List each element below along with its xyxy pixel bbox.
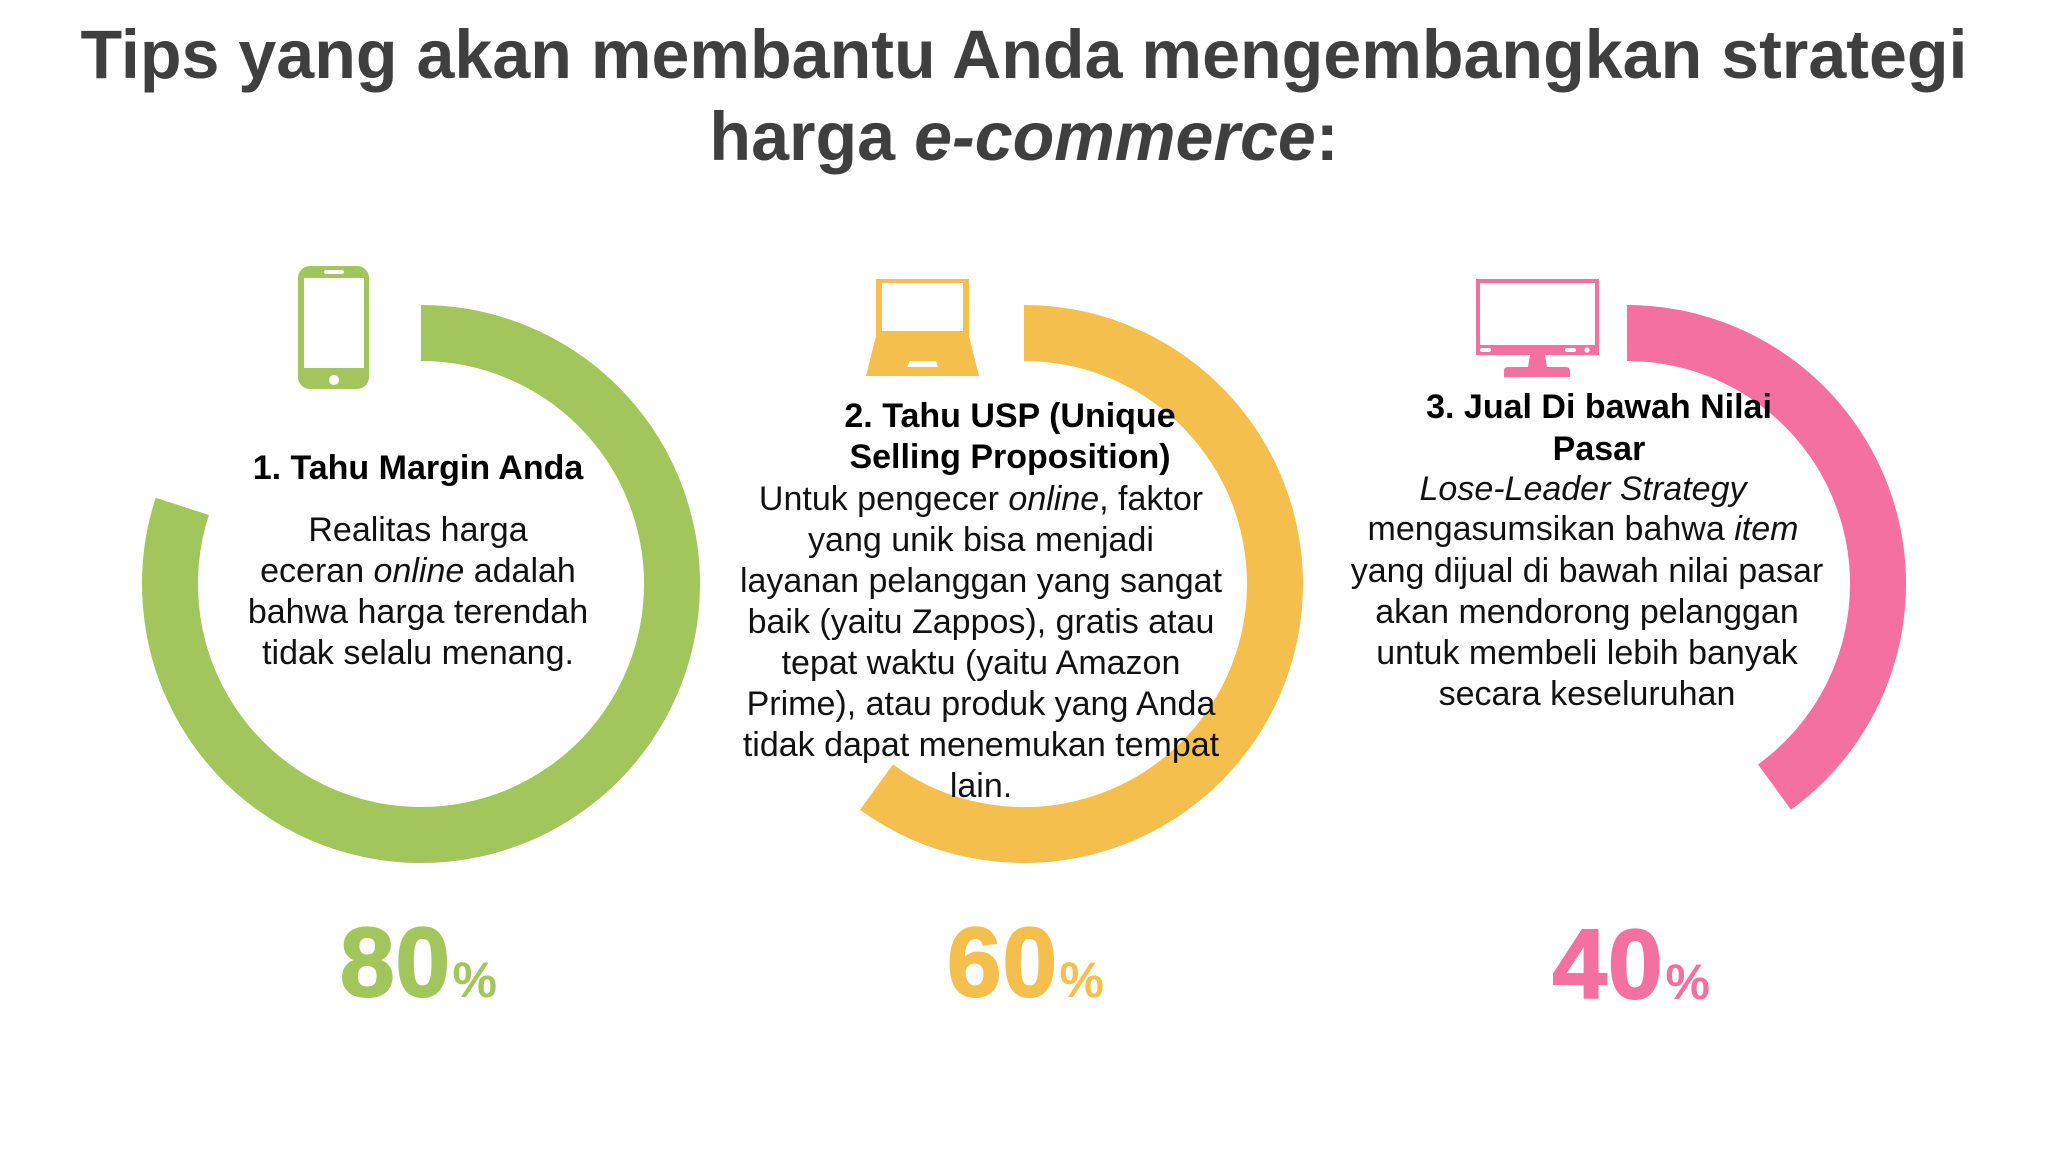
heading: tip 1: 1. Tahu Margin Anda	[253, 449, 584, 487]
heading: tip 2: Selling Proposition)	[849, 438, 1171, 476]
icon: monitor	[1476, 279, 1599, 377]
text: tip 2 body: tidak dapat menemukan tempat	[743, 726, 1220, 764]
heading: tip 2	[844, 397, 1176, 476]
text: tip 3 body: untuk membeli lebih banyak	[1376, 634, 1799, 672]
text: tip 3 body: secara keseluruhan	[1439, 675, 1735, 713]
panel: tip 1 margin	[170, 266, 672, 1017]
text: tip 2 body: layanan pelanggan yang sangat	[740, 562, 1223, 600]
value: 60%: 60	[947, 907, 1058, 1017]
text: tip 2 body: lain.	[950, 767, 1012, 805]
text: tip 1 body: Realitas harga	[308, 511, 528, 549]
text: tip 2 body: Untuk pengecer online, faktor	[759, 480, 1203, 518]
text: tip 2 body: baik (yaitu Zappos), gratis atau	[748, 603, 1214, 641]
text: tip 3 body	[1351, 470, 1823, 713]
panel: tip 3 below market	[1351, 279, 1878, 1019]
text: tip 1 body	[248, 511, 588, 672]
heading: tip 2: 2. Tahu USP (Unique	[844, 397, 1176, 435]
panel: tip 2 USP	[740, 279, 1275, 1017]
title: Tips yang akan membantu Anda mengembangkan strategi	[81, 17, 1967, 93]
value: 80%: 80	[340, 907, 451, 1017]
value: 60%: %	[1060, 952, 1104, 1008]
icon: smartphone	[298, 266, 369, 389]
text: tip 1 body: eceran online adalah	[260, 552, 576, 590]
title	[81, 17, 1967, 175]
text: tip 2 body: tepat waktu (yaitu Amazon	[782, 644, 1180, 682]
value: 40%: %	[1666, 954, 1710, 1010]
value: 80%: %	[452, 952, 497, 1008]
value: 40%: 40	[1552, 909, 1664, 1019]
text: tip 2 body: Prime), atau produk yang Anda	[747, 685, 1215, 723]
text: tip 2 body: yang unik bisa menjadi	[808, 521, 1154, 559]
ring: 40% pink	[1627, 333, 1878, 787]
title: harga e-commerce:	[709, 99, 1339, 175]
ring: 60% amber	[876, 333, 1275, 835]
text: tip 1 body: bahwa harga terendah	[248, 593, 588, 631]
heading: tip 3: Pasar	[1553, 430, 1645, 468]
text: tip 2 body	[740, 480, 1223, 805]
text: tip 1 body: tidak selalu menang.	[262, 634, 574, 672]
icon: laptop	[866, 279, 979, 376]
text: tip 3 body: akan mendorong pelanggan	[1375, 593, 1799, 631]
text: tip 3 body: mengasumsikan bahwa item	[1368, 510, 1798, 548]
text: tip 3 body: Lose-Leader Strategy	[1420, 470, 1748, 508]
text: tip 3 body: yang dijual di bawah nilai pasar	[1351, 552, 1823, 590]
heading: tip 3	[1426, 388, 1772, 468]
heading: tip 3: 3. Jual Di bawah Nilai	[1426, 388, 1772, 426]
ring: 80% green	[170, 333, 672, 835]
